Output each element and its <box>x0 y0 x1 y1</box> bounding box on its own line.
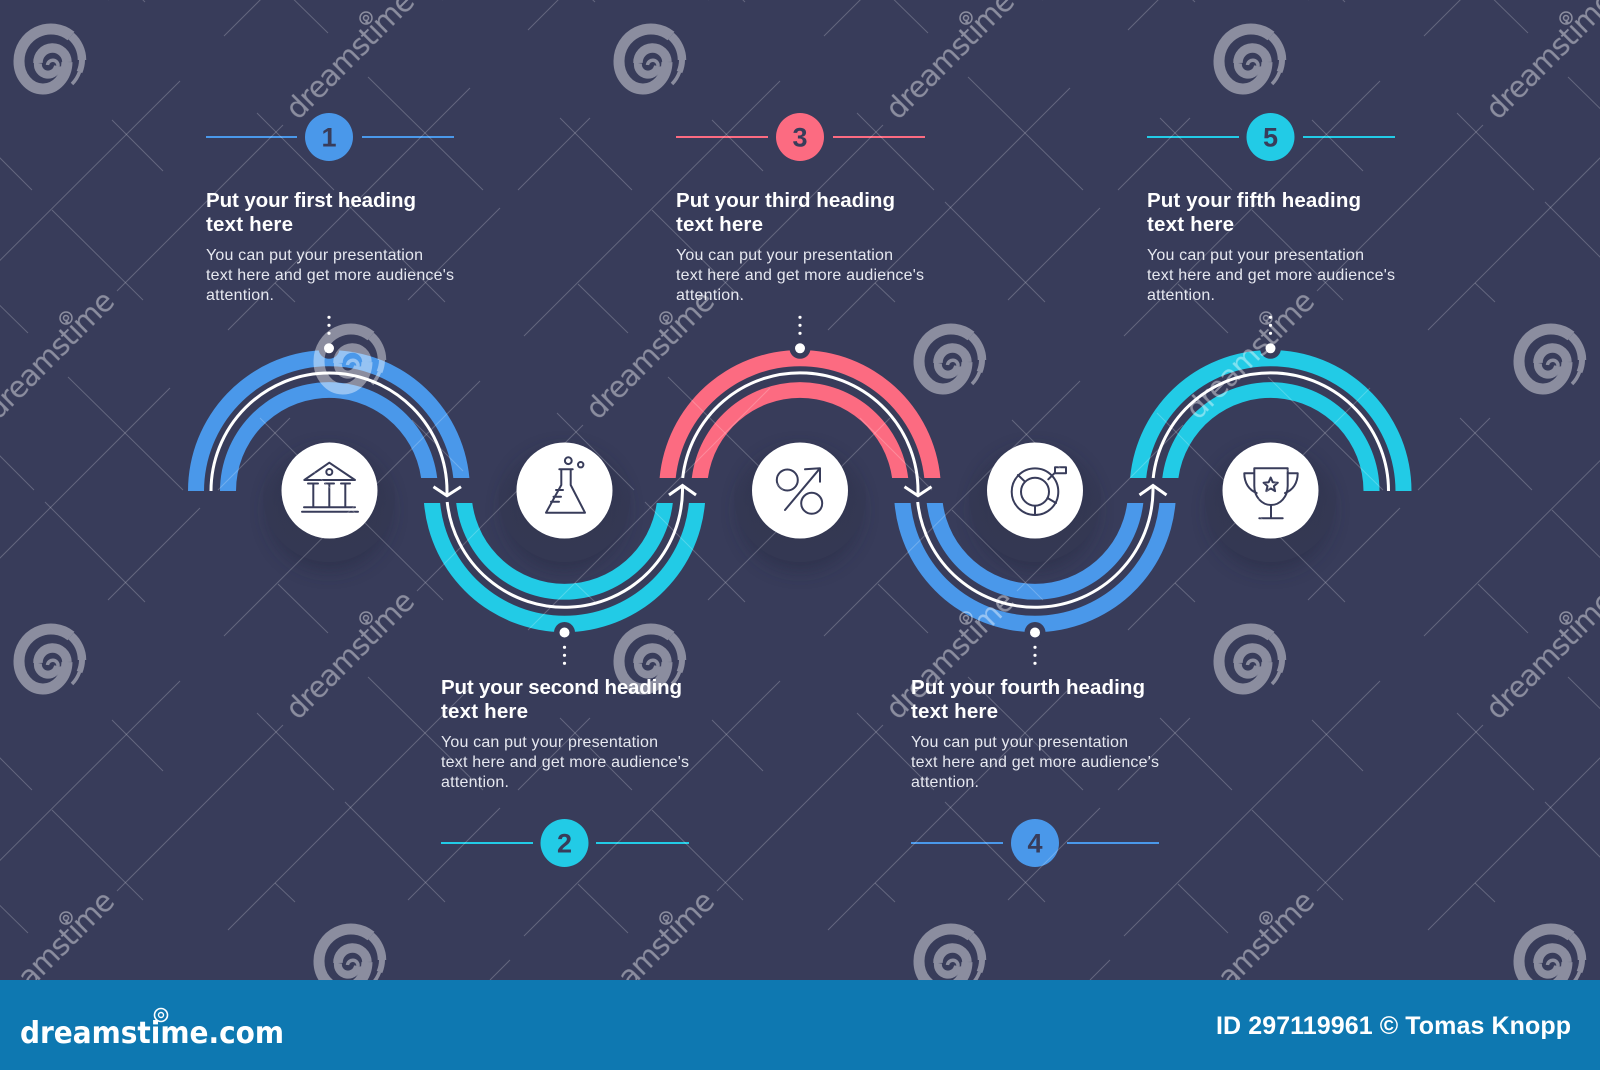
footer bar <box>0 980 1600 1070</box>
step 1 text block: Put your first heading <box>206 189 416 212</box>
step 2 text block: attention. <box>441 774 509 791</box>
step 2 number marker: 2 <box>557 828 572 858</box>
step 3 text block: You can put your presentation <box>676 247 893 264</box>
step 2 number marker <box>441 819 689 867</box>
step 1 number marker: 1 <box>321 122 337 152</box>
step 3 text block: text here and get more audience's <box>676 267 924 284</box>
step 3 text block: Put your third heading <box>676 189 895 212</box>
step 3 text block <box>676 189 924 304</box>
icon: trophy with star <box>1222 442 1318 538</box>
step 2 text block: You can put your presentation <box>441 734 658 751</box>
step 4 text block: Put your fourth heading <box>911 676 1145 699</box>
step 3 text block: text here <box>676 213 763 236</box>
step 3 number marker: 3 <box>792 122 808 152</box>
icon: donut chart with flag <box>987 442 1083 538</box>
step 5 text block <box>1147 189 1395 304</box>
icon: bank building <box>282 442 378 538</box>
step 2 text block <box>441 676 689 791</box>
step 1 text block <box>206 189 454 304</box>
step 5 text block: You can put your presentation <box>1147 247 1364 264</box>
step 2 text block: text here <box>441 700 528 723</box>
step 4 text block: text here <box>911 700 998 723</box>
step 4 number marker <box>911 819 1159 867</box>
icon: percent with arrow <box>752 442 848 538</box>
step 1 text block: You can put your presentation <box>206 247 423 264</box>
step 4 text block: You can put your presentation <box>911 734 1128 751</box>
arch 3: pink top arch <box>660 316 940 496</box>
step 5 text block: attention. <box>1147 287 1215 304</box>
watermark text: dreamstime <box>579 284 721 426</box>
icon disc shadows <box>263 430 1336 570</box>
step 1 text block: attention. <box>206 287 274 304</box>
footer logo: dreamstime.com <box>20 1016 284 1051</box>
arch 5: cyan top arch <box>1130 316 1412 491</box>
step 2 text block: text here and get more audience's <box>441 754 689 771</box>
step 1 text block: text here and get more audience's <box>206 267 454 284</box>
step 1 number marker <box>206 113 454 161</box>
step 4 text block: attention. <box>911 774 979 791</box>
arch 4: blue bottom arch <box>894 486 1176 665</box>
step 3 number marker <box>676 113 925 161</box>
arch 1: blue top arch <box>188 316 469 496</box>
step 5 text block: text here and get more audience's <box>1147 267 1395 284</box>
step 4 number marker: 4 <box>1027 828 1043 858</box>
step 5 text block: Put your fifth heading <box>1147 189 1361 212</box>
step 4 text block <box>911 676 1159 791</box>
watermark text: dreamstime <box>1179 884 1321 1026</box>
step 2 text block: Put your second heading <box>441 676 682 699</box>
icon: lab flask <box>516 442 612 538</box>
step 5 number marker: 5 <box>1263 122 1278 152</box>
step 4 text block: text here and get more audience's <box>911 754 1159 771</box>
watermark text: dreamstime <box>879 584 1021 726</box>
watermark text: dreamstime <box>579 884 721 1026</box>
step 5 number marker <box>1147 113 1395 161</box>
step 3 text block: attention. <box>676 287 744 304</box>
watermark text: dreamstime <box>279 584 421 726</box>
footer credit: ID 297119961 © Tomas Knopp <box>1216 1012 1571 1040</box>
step 5 text block: text here <box>1147 213 1234 236</box>
arch 2: cyan bottom arch <box>424 486 705 665</box>
watermark text: dreamstime <box>1179 284 1321 426</box>
step 1 text block: text here <box>206 213 293 236</box>
